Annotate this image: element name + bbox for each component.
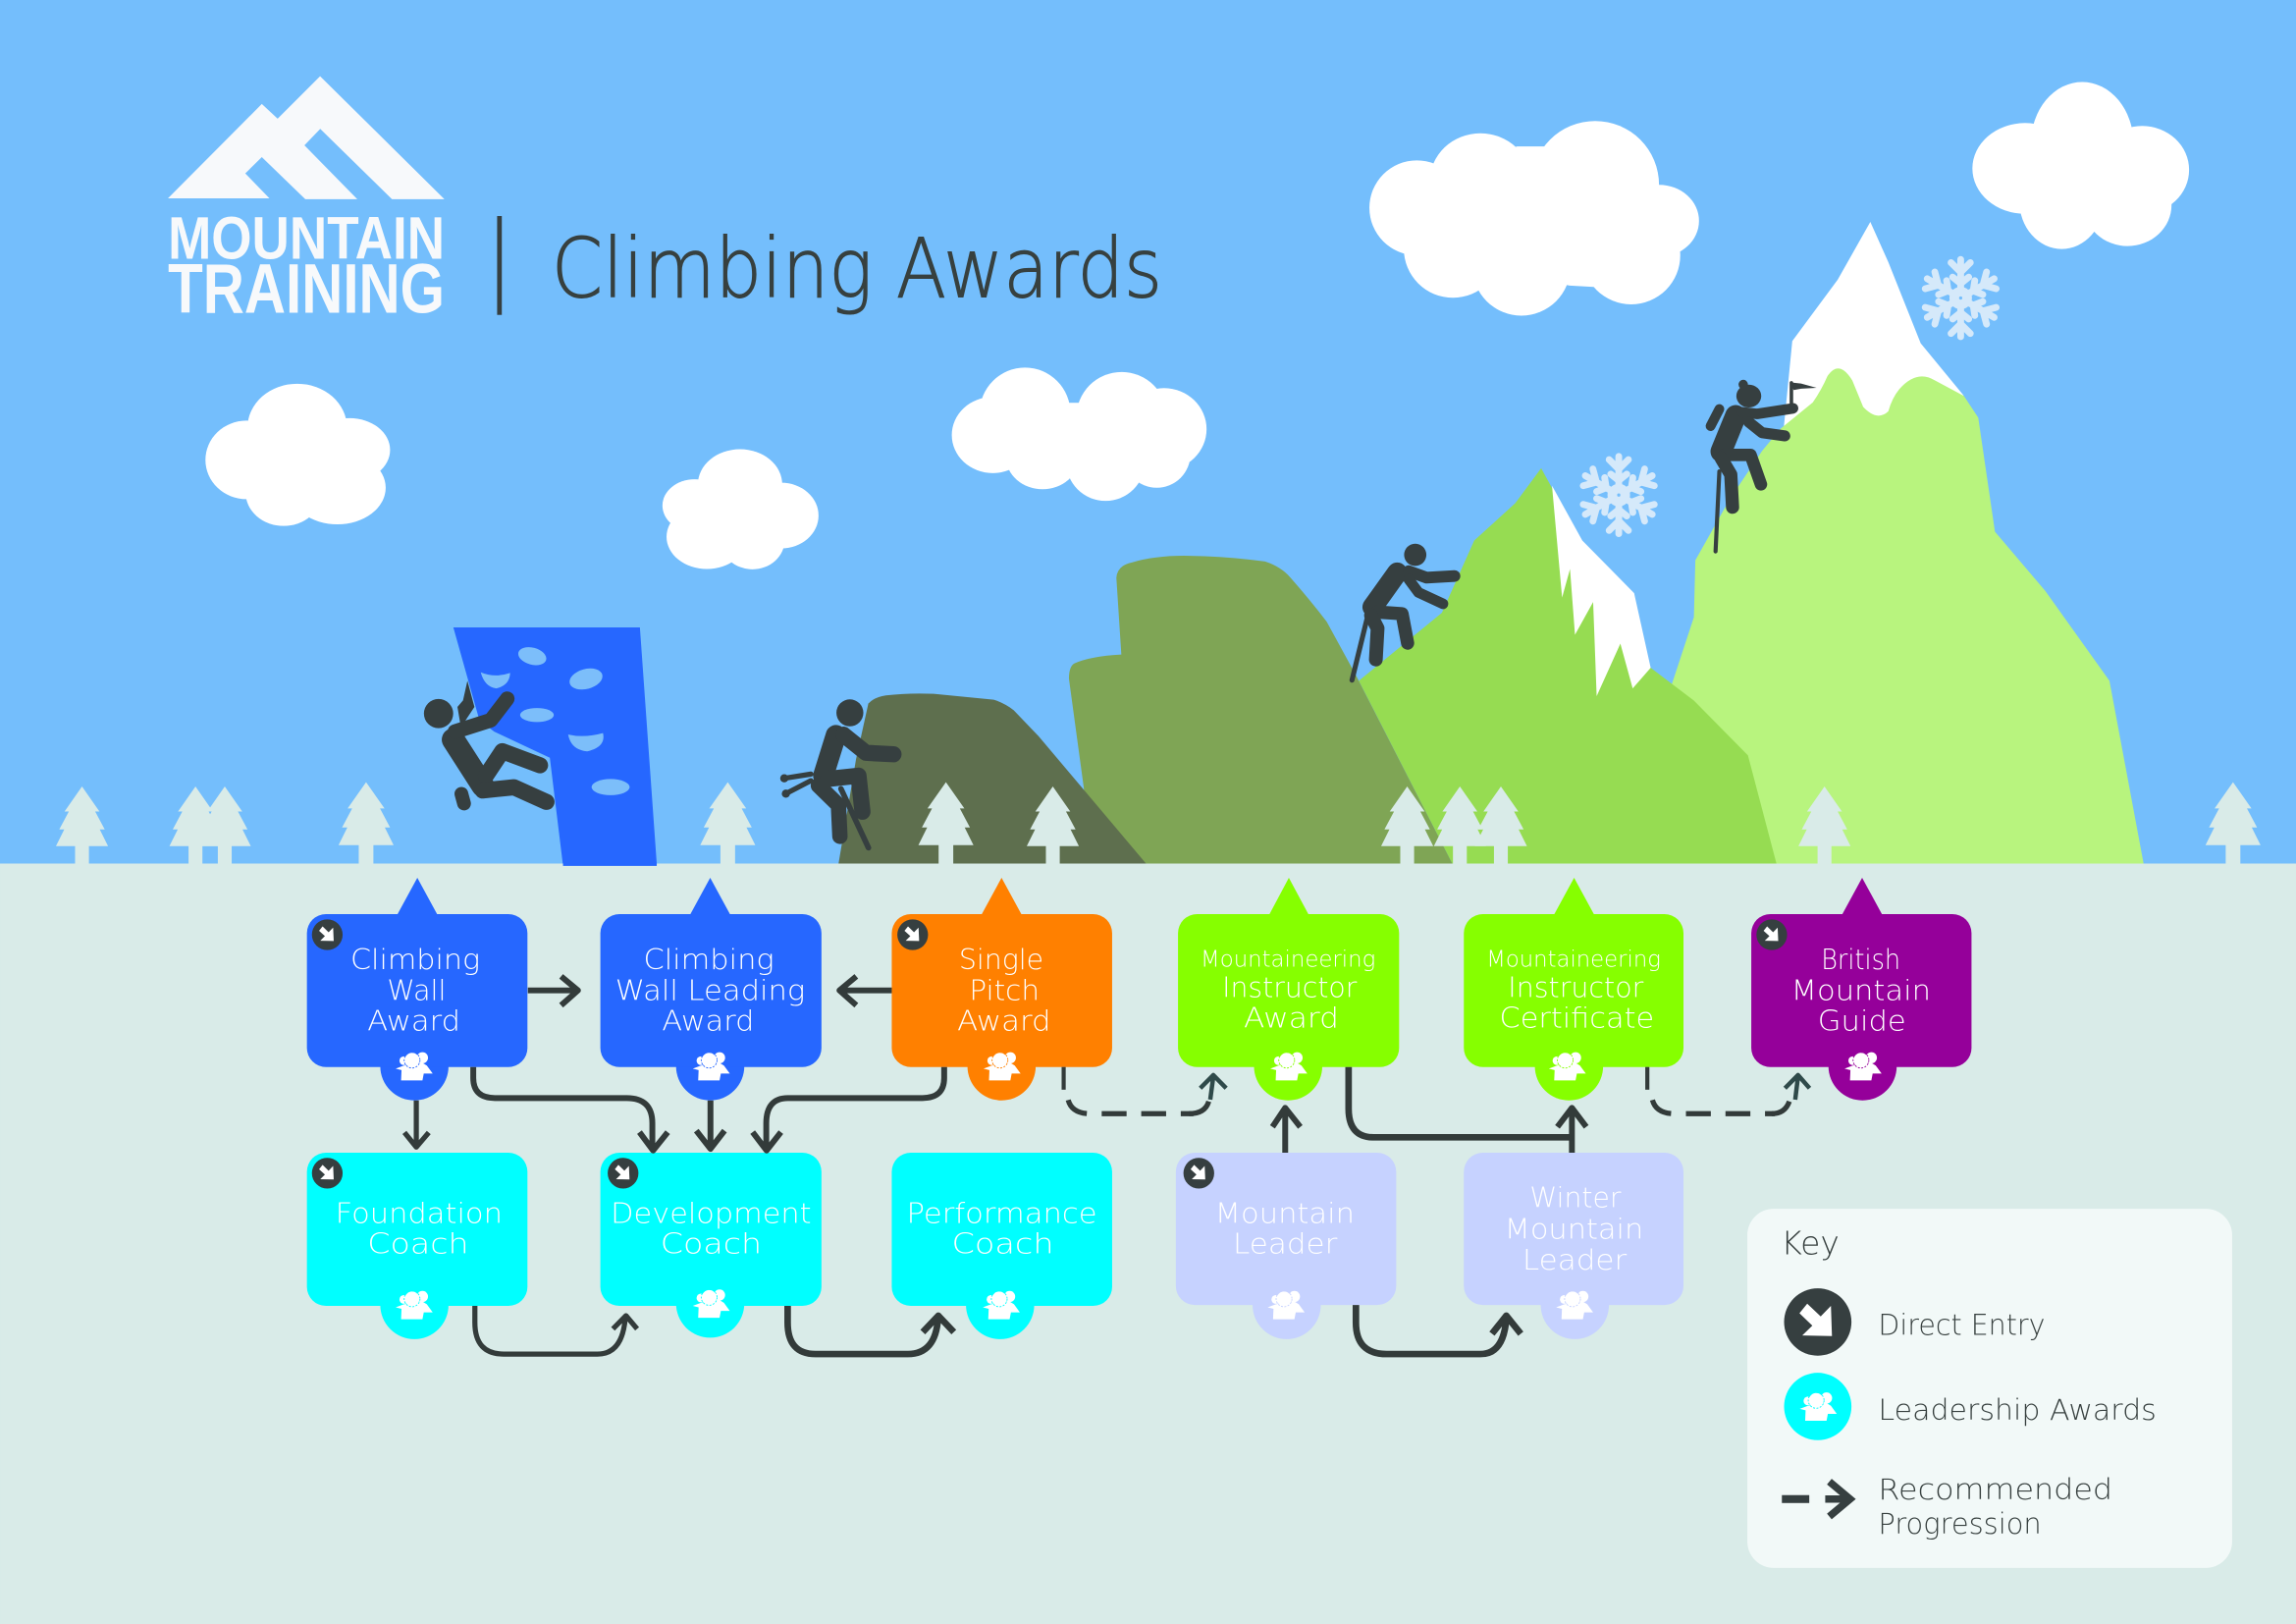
logo mountain mark [168, 77, 445, 199]
mountain: tallest with snow cap [1611, 222, 2144, 864]
mountain body [1611, 368, 2144, 864]
arrow: Foundation to Development [475, 1306, 637, 1354]
logo wordmark: MOUNTAIN [168, 204, 445, 271]
sky background [0, 0, 2296, 879]
cloud: top right [1972, 82, 2189, 249]
award: Foundation Coach: Coach [367, 1227, 469, 1260]
title: Climbing Awards [552, 220, 1162, 316]
logo wordmark: TRAINING [168, 249, 445, 328]
key label: recommended progression: Recommended [1878, 1473, 2112, 1506]
logo: Mountain Training [168, 77, 445, 328]
key icon: recommended progression [1782, 1482, 1850, 1517]
award: Mountaineering Instructor Certificate: Instructor [1508, 971, 1644, 1003]
award: Foundation Coach: Foundation [336, 1197, 503, 1229]
award: Single Pitch Award: Pitch [969, 975, 1040, 1007]
award: Climbing Wall Award: Wall [387, 975, 447, 1007]
key label: recommended progression [1878, 1473, 2112, 1541]
award: Mountain Leader: Mountain [1215, 1197, 1355, 1229]
award: Mountaineering Instructor Award: Mountaineering [1201, 947, 1375, 973]
climber on mid mountain [1352, 544, 1455, 680]
key icon: direct entry [1784, 1288, 1851, 1356]
climber on summit [1711, 380, 1817, 552]
arrow: Instructor Certificate to British Mountain Guide dashed [1647, 1067, 1809, 1113]
award: British Mountain Guide: Mountain [1791, 975, 1931, 1007]
award: Climbing Wall Award: Award [367, 1005, 460, 1038]
mountain: middle green with snow [1359, 468, 1777, 864]
award: British Mountain Guide: Guide [1818, 1005, 1906, 1038]
arrow: Mountain Leader to Instructor Award [1272, 1108, 1301, 1153]
award: British Mountain Guide [1751, 878, 1971, 1101]
award: Single Pitch Award: Single [959, 944, 1043, 976]
arrow: Development to Performance [787, 1306, 954, 1354]
award: Single Pitch Award [891, 878, 1112, 1101]
award: Development Coach: Development [611, 1197, 812, 1229]
key panel [1747, 1209, 2232, 1568]
ground [0, 864, 2296, 1624]
arrow: Wall Leading to Development [696, 1101, 724, 1149]
award: Winter Mountain Leader [1464, 1153, 1683, 1339]
arrow: Climbing Wall to Foundation [404, 1101, 429, 1147]
award: Climbing Wall Leading Award [601, 878, 822, 1101]
award: Mountaineering Instructor Award: Award [1244, 1001, 1339, 1034]
award: Mountaineering Instructor Certificate: Certificate [1500, 1001, 1654, 1034]
climber on crag [780, 699, 893, 847]
arrow: Single Pitch to Wall Leading [839, 976, 891, 1005]
key heading: Key [1781, 1225, 1840, 1263]
award: Mountaineering Instructor Award [1178, 878, 1399, 1101]
cloud: left [205, 384, 390, 526]
key icon: leadership awards [1784, 1373, 1851, 1440]
wall base [563, 863, 657, 866]
climbing wall [454, 627, 657, 866]
award: Mountain Leader: Leader [1233, 1227, 1338, 1260]
cloud: large centre [1369, 121, 1699, 315]
award: Climbing Wall Leading Award: Climbing [643, 944, 774, 976]
arrow: Climbing Wall to Wall Leading [528, 976, 578, 1005]
arrow: Winter Mountain Leader to Instructor Certificate [1558, 1108, 1586, 1153]
mountain body [1359, 468, 1777, 864]
award: Climbing Wall Leading Award: Wall Leading [615, 975, 805, 1007]
key label: recommended progression: Progression [1878, 1507, 2042, 1541]
snowflake: right [1922, 259, 1999, 337]
award: Mountain Leader [1176, 1153, 1396, 1339]
key label: leadership awards: Leadership Awards [1878, 1393, 2157, 1427]
hill: dark crag [838, 693, 1147, 864]
award: Mountaineering Instructor Award: Instructor [1222, 971, 1358, 1003]
snow cap [1784, 222, 1963, 440]
pine trees [56, 783, 2261, 864]
logo wordmark [168, 204, 445, 328]
title divider [497, 216, 502, 315]
award: Foundation Coach [307, 1153, 527, 1339]
key label: direct entry: Direct Entry [1878, 1309, 2045, 1342]
award: Winter Mountain Leader: Mountain [1505, 1213, 1643, 1245]
arrow: Instructor Award to Instructor Certificate [1349, 1067, 1572, 1137]
hill: olive crag [1069, 556, 1453, 864]
award: Mountaineering Instructor Certificate: Mountaineering [1486, 947, 1661, 973]
award: Climbing Wall Award: Climbing [350, 944, 480, 976]
award: Single Pitch Award: Award [957, 1005, 1051, 1038]
award: Performance Coach: Coach [951, 1227, 1054, 1260]
cloud: middle wide [952, 367, 1206, 501]
wall panel [454, 627, 657, 866]
arrow: Single Pitch to Development [753, 1067, 944, 1151]
snow streak [1552, 486, 1651, 696]
award: Winter Mountain Leader: Winter [1529, 1182, 1622, 1215]
award: Development Coach: Coach [661, 1227, 762, 1260]
award: Climbing Wall Award [307, 878, 527, 1101]
wall holds [481, 644, 629, 795]
award: Climbing Wall Leading Award: Award [662, 1005, 754, 1038]
award: Performance Coach [891, 1153, 1112, 1339]
climber on wall [424, 680, 547, 803]
award: Performance Coach: Performance [907, 1197, 1097, 1229]
arrow: Climbing Wall to Development [473, 1067, 667, 1151]
cloud: middle small [663, 450, 819, 569]
snowflake: middle [1580, 457, 1657, 534]
award: Mountaineering Instructor Certificate [1464, 878, 1683, 1101]
award: Winter Mountain Leader: Leader [1522, 1244, 1628, 1276]
award: Development Coach [601, 1153, 822, 1337]
award: British Mountain Guide: British [1821, 944, 1900, 976]
arrow: Mountain Leader to Winter Mountain Leader [1356, 1305, 1521, 1354]
arrow: Single Pitch to Mountaineering Instructor dashed [1064, 1067, 1226, 1113]
